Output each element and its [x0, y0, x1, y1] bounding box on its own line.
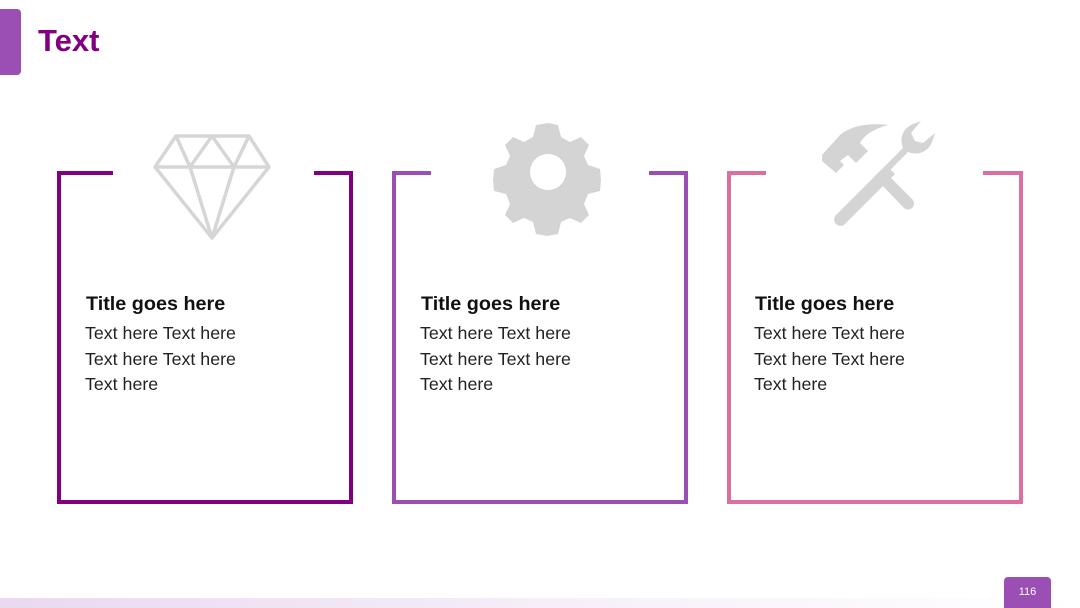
- panel 3 text: Title goes here: [755, 293, 894, 315]
- page number: 116: [1019, 586, 1036, 598]
- panel 2 text: Text here Text here: [420, 348, 571, 368]
- panel frame 1: [59, 173, 351, 502]
- panel 3 text: Text here Text here: [754, 348, 905, 368]
- panel 3 text: Text here: [754, 374, 827, 394]
- panel 2 text: Text here: [420, 374, 493, 394]
- title: Text: [38, 23, 99, 58]
- panel 1 text: Title goes here: [86, 293, 225, 315]
- panel frame 2: [394, 173, 686, 502]
- panel 1 text: Text here: [85, 374, 158, 394]
- panel 1 text: Text here Text here: [85, 348, 236, 368]
- header tab: [0, 9, 21, 75]
- panel 3 text: Text here Text here: [754, 323, 905, 343]
- panel 1 text: [85, 293, 236, 394]
- page number: [1004, 577, 1051, 608]
- panel 2 text: Title goes here: [421, 293, 560, 315]
- panel 2 text: [420, 293, 571, 394]
- panel 2 text: Text here Text here: [420, 323, 571, 343]
- icon: gear: [493, 123, 601, 236]
- icon: hammer and wrench: [822, 121, 935, 226]
- panel frame 3: [729, 173, 1021, 502]
- panel 3 text: [754, 293, 905, 394]
- bottom gradient bar: [0, 598, 1080, 608]
- panel 1 text: Text here Text here: [85, 323, 236, 343]
- icon: diamond: [155, 136, 269, 238]
